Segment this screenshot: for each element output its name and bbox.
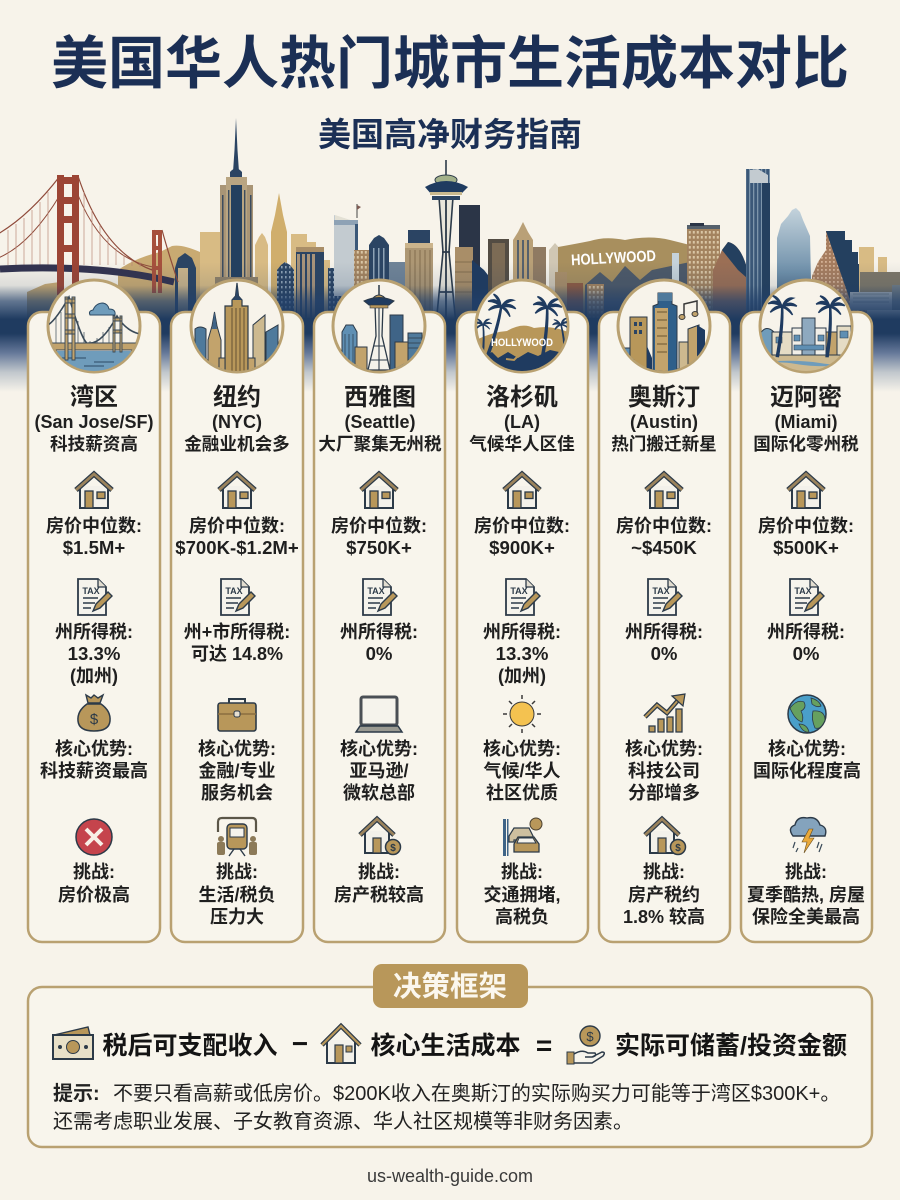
city summary: 科技薪资高 (50, 434, 138, 454)
icon: briefcase (218, 699, 256, 731)
challenge: 压力大 (210, 907, 264, 927)
panel: decision framework (28, 964, 872, 1147)
panel: los angeles (457, 280, 588, 942)
tip text: 提示: (53, 1082, 100, 1105)
median home price (175, 515, 299, 558)
core advantage (40, 738, 148, 781)
icon: tax form (221, 579, 255, 615)
median home price: 房价中位数: (189, 515, 285, 536)
state income tax: 13.3% (68, 643, 121, 664)
empire state (215, 118, 258, 325)
icon: house (504, 474, 540, 508)
state income tax: 州所得税: (625, 622, 703, 642)
icon: hand holding coin (567, 1026, 604, 1064)
median home price: $1.5M+ (63, 537, 125, 558)
icon: sun (503, 695, 541, 733)
challenge: 交通拥堵, (483, 884, 561, 905)
median home price: 房价中位数: (474, 515, 570, 536)
state income tax: 州所得税: (767, 622, 845, 642)
icon: tax form (78, 579, 112, 615)
icon: tax form (648, 579, 682, 615)
core advantage: 核心优势: (340, 738, 418, 759)
challenge: 高税负 (495, 906, 549, 927)
city summary: 热门搬迁新星 (611, 434, 717, 454)
city english name: (San Jose/SF) (34, 412, 154, 432)
city summary: 国际化零州税 (753, 434, 859, 454)
subtitle: 美国高净财务指南 (318, 116, 582, 153)
state and city income tax: 州+市所得税: (184, 621, 290, 642)
state and city income tax (184, 621, 290, 664)
challenge: 挑战: (73, 862, 115, 882)
minus sign: − (292, 1028, 308, 1059)
icon: house with property tax (360, 819, 400, 854)
city name: 湾区 (70, 383, 118, 411)
city english name: (Austin) (630, 412, 698, 432)
footer source: us-wealth-guide.com (367, 1166, 533, 1186)
challenge: 挑战: (785, 862, 827, 882)
tip text: 不要只看高薪或低房价。$200K收入在奥斯汀的实际购买力可能等于湾区$300K+。 (113, 1082, 840, 1105)
challenge (747, 862, 865, 927)
hollywood hill: HOLLYWOOD (571, 248, 656, 269)
state income tax: 13.3% (496, 643, 549, 664)
skyline illustration (0, 118, 900, 325)
icon: house (219, 474, 255, 508)
median home price (46, 515, 142, 558)
median home price (331, 515, 427, 558)
challenge: 挑战: (216, 862, 258, 882)
median home price: $900K+ (489, 537, 555, 558)
state income tax (483, 622, 561, 686)
city name: 迈阿密 (770, 383, 842, 411)
state income tax (625, 622, 703, 664)
icon: hand holding coin: $ (586, 1029, 594, 1044)
median home price: $700K-$1.2M+ (175, 537, 299, 558)
icon: globe (788, 695, 826, 733)
city summary: 金融业机会多 (184, 434, 290, 454)
core advantage: 核心优势: (625, 738, 703, 759)
navy gradient band (0, 262, 900, 392)
challenge (623, 862, 705, 927)
formula term: after-tax income: 税后可支配收入 (102, 1032, 278, 1060)
panel: miami (741, 280, 872, 942)
icon: hollywood palms: HOLLYWOOD (491, 337, 553, 349)
city english name: (NYC) (212, 412, 262, 432)
city name: 纽约 (213, 384, 261, 411)
icon: red x (76, 819, 112, 855)
space needle (425, 160, 468, 325)
core advantage (625, 738, 703, 803)
median home price: ~$450K (631, 537, 697, 558)
core advantage: 科技薪资最高 (40, 760, 148, 781)
city name: 西雅图 (344, 384, 416, 411)
city english name: (Miami) (774, 412, 838, 432)
median home price (474, 515, 570, 558)
icon: tax form (790, 579, 824, 615)
state income tax: 0% (651, 643, 678, 664)
core advantage: 社区优质 (486, 782, 558, 803)
state income tax (340, 622, 418, 664)
icon: empire state (191, 280, 283, 372)
formula term: investable amount: 实际可储蓄/投资金额 (615, 1032, 847, 1060)
state income tax: 州所得税: (55, 622, 133, 642)
panel: new york (171, 280, 303, 942)
panel: austin (599, 280, 730, 942)
icon: tax form: TAX (82, 586, 100, 596)
core advantage: 亚马逊/ (349, 761, 409, 781)
challenge: 1.8% 较高 (623, 906, 705, 927)
core advantage (483, 738, 561, 803)
city name: 洛杉矶 (486, 384, 558, 411)
title: 美国华人热门城市生活成本对比 (51, 32, 849, 96)
challenge (198, 862, 276, 927)
icon: tax form (363, 579, 397, 615)
core advantage: 核心优势: (483, 738, 561, 759)
icon: tax form: TAX (225, 586, 243, 596)
icon: tax form (506, 579, 540, 615)
icon: house (361, 474, 397, 508)
state income tax: 0% (793, 643, 820, 664)
state income tax (767, 622, 845, 664)
core advantage: 国际化程度高 (753, 760, 861, 781)
state income tax: 0% (366, 643, 393, 664)
challenge: 房价极高 (58, 884, 130, 905)
heading badge: 决策框架 (393, 971, 507, 1003)
median home price (758, 515, 854, 558)
icon: miami palms and art deco (760, 280, 852, 372)
heading badge (373, 964, 528, 1008)
icon: storm cloud (790, 818, 826, 853)
core advantage: 核心优势: (198, 738, 276, 759)
state income tax (55, 622, 133, 686)
state and city income tax: 可达 14.8% (191, 644, 283, 664)
median home price: $750K+ (346, 537, 412, 558)
core advantage: 核心优势: (55, 738, 133, 759)
panel: seattle (314, 280, 445, 942)
median home price: 房价中位数: (758, 515, 854, 536)
icon: house (646, 474, 682, 508)
city summary: 大厂聚集无州税 (318, 434, 442, 454)
formula term: core living cost: 核心生活成本 (370, 1032, 521, 1060)
challenge (334, 862, 424, 905)
city english name: (LA) (504, 412, 540, 432)
golden gate bridge (0, 176, 178, 282)
median home price: $500K+ (773, 537, 839, 558)
city english name: (Seattle) (344, 412, 416, 432)
core advantage: 金融/专业 (198, 760, 276, 781)
challenge (58, 862, 130, 905)
city name: 奥斯汀 (628, 384, 700, 411)
core advantage (340, 738, 418, 803)
core advantage: 服务机会 (201, 783, 273, 803)
city summary: 气候华人区佳 (469, 434, 575, 454)
median home price: 房价中位数: (46, 515, 142, 536)
tip text: 还需考虑职业发展、子女教育资源、华人社区规模等非财务因素。 (53, 1110, 633, 1133)
icon: space needle (333, 280, 425, 372)
panel: bay area (28, 280, 160, 942)
icon: house with property tax (645, 819, 686, 854)
challenge: 房产税约 (628, 885, 700, 905)
state income tax: 州所得税: (483, 622, 561, 642)
icon: tax form: TAX (367, 586, 385, 596)
icon: traffic jam (503, 818, 542, 856)
challenge (483, 862, 561, 927)
core advantage: 气候/华人 (483, 761, 561, 781)
icon: golden gate (48, 280, 140, 373)
challenge: 挑战: (643, 862, 685, 882)
challenge: 挑战: (501, 862, 543, 882)
icon: house (76, 474, 112, 508)
icon: tax form: TAX (510, 586, 528, 596)
core advantage: 科技公司 (628, 761, 700, 781)
state income tax: (加州) (498, 666, 546, 686)
icon: tax form: TAX (652, 586, 670, 596)
challenge: 保险全美最高 (752, 906, 860, 927)
state income tax: 州所得税: (340, 622, 418, 642)
state income tax: (加州) (70, 666, 118, 686)
icon: laptop (356, 697, 402, 732)
median home price (616, 515, 712, 558)
tip text (53, 1082, 840, 1133)
icon: money bag (78, 695, 110, 731)
core advantage (753, 738, 861, 781)
core advantage (198, 738, 276, 803)
median home price: 房价中位数: (616, 515, 712, 536)
hollywood hill (558, 238, 690, 325)
core advantage: 核心优势: (768, 738, 846, 759)
challenge: 生活/税负 (198, 885, 276, 905)
icon: austin towers and music note (618, 280, 710, 372)
icon: growth chart (645, 694, 685, 732)
icon: commuter train (217, 818, 257, 856)
icon: hollywood palms (474, 280, 574, 372)
icon: cash (53, 1027, 93, 1059)
challenge: 夏季酷热, 房屋 (747, 885, 865, 905)
equals sign: = (536, 1030, 552, 1061)
icon: house (788, 474, 824, 508)
core advantage: 微软总部 (343, 782, 415, 803)
median home price: 房价中位数: (331, 515, 427, 536)
challenge: 房产税较高 (334, 884, 424, 905)
core advantage: 分部增多 (628, 782, 700, 803)
icon: house (322, 1026, 360, 1063)
challenge: 挑战: (358, 862, 400, 882)
icon: money bag: $ (90, 711, 99, 728)
icon: tax form: TAX (794, 586, 812, 596)
